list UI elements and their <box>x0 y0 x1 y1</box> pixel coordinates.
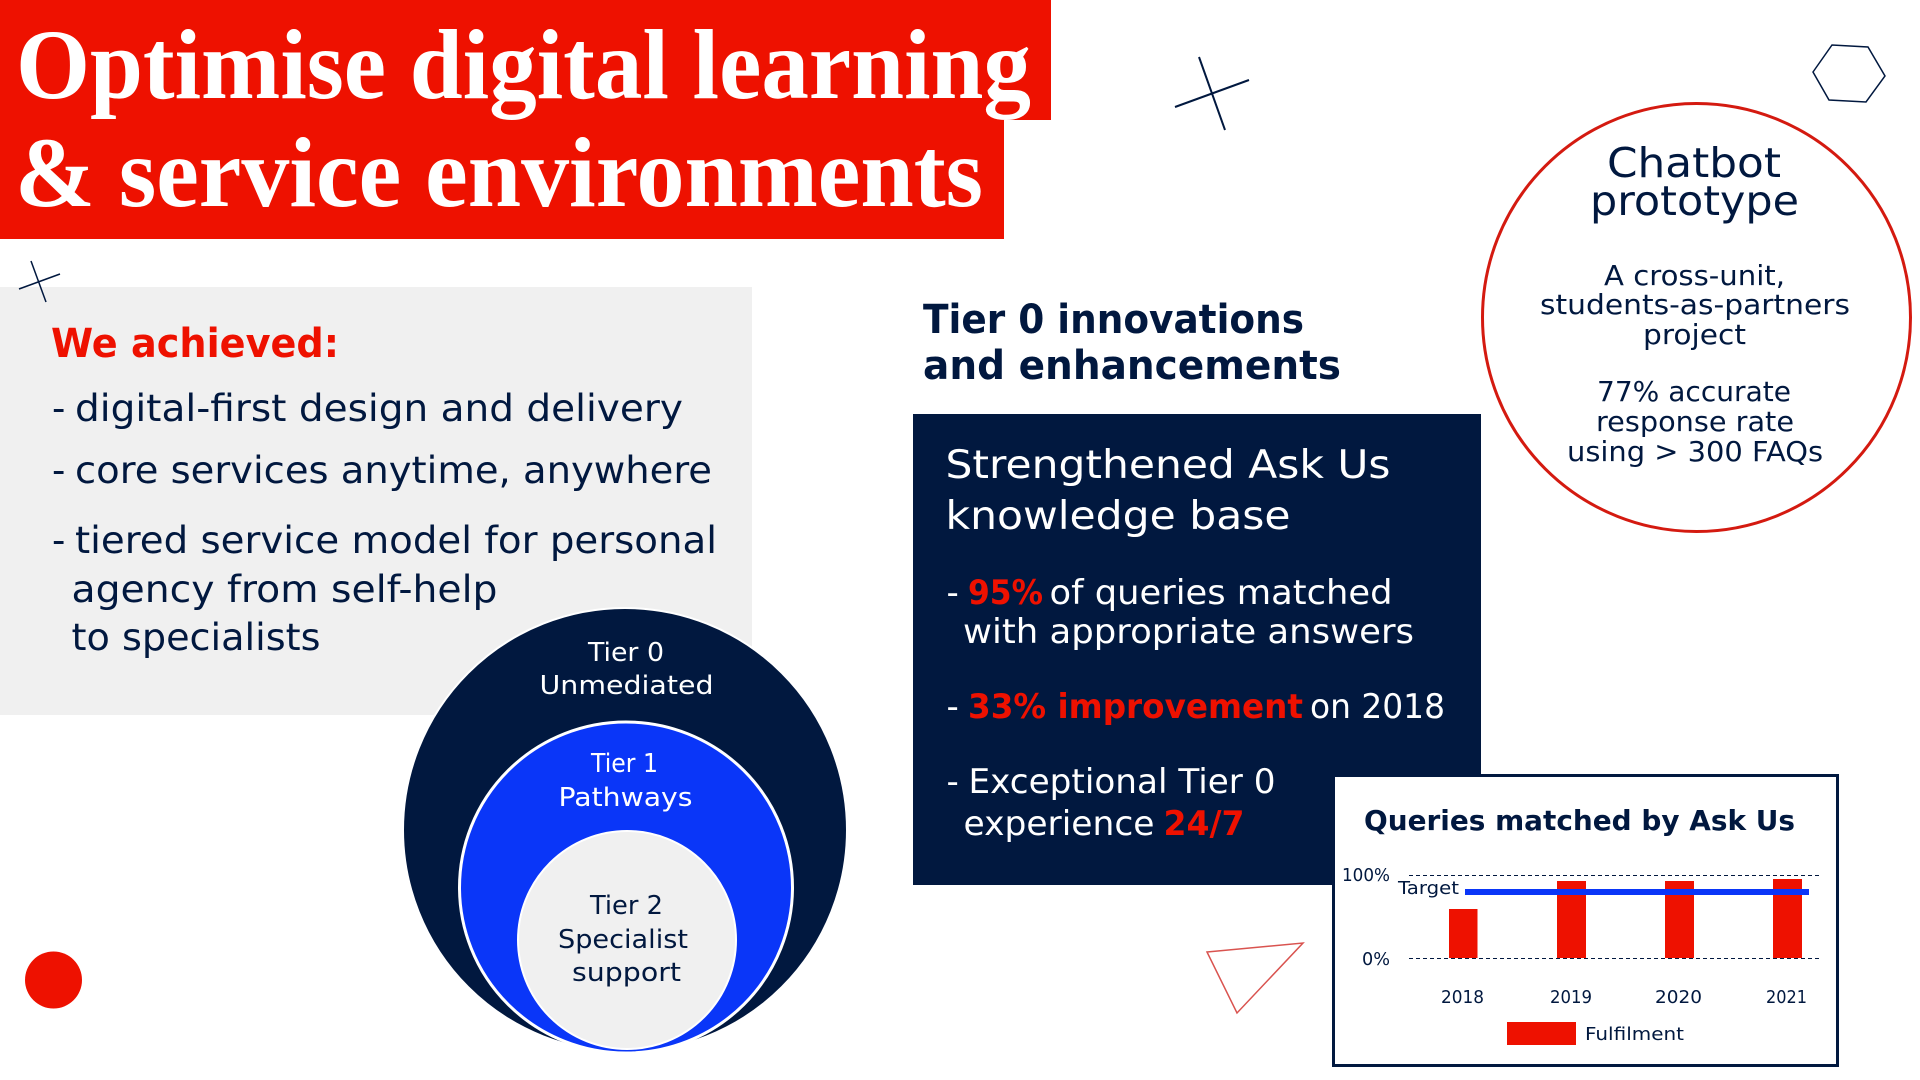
bullet: 33% improvement: on 2018 <box>1310 687 1445 727</box>
panel heading <box>946 443 1390 539</box>
bullet: exceptional experience: 24/7 <box>1164 804 1244 844</box>
tier 1 label: Tier 1 <box>590 749 658 779</box>
tier 0 label: Tier 0 <box>587 638 664 668</box>
target label: Target <box>1397 879 1459 899</box>
bullet: 33% improvement: 33% improvement <box>968 687 1303 727</box>
legend <box>1507 1022 1684 1045</box>
tier 2 label <box>558 891 688 988</box>
heading: we achieved: We achieved: <box>51 321 339 367</box>
chatbot heading <box>1590 139 1799 225</box>
title line 1: Optimise digital learning <box>16 9 1031 120</box>
achievement list <box>52 387 717 659</box>
icon: triangle outline <box>1207 943 1303 1013</box>
bullet: 33% improvement <box>946 687 1445 727</box>
tier 1 label <box>558 749 692 813</box>
chart title: Queries matched by Ask Us <box>1364 805 1795 837</box>
chatbot heading: prototype <box>1590 177 1799 225</box>
x axis labels: 2019 <box>1550 987 1592 1008</box>
tier 2 label: support <box>572 958 681 988</box>
icon: hexagon <box>1813 45 1885 102</box>
panel: chatbot prototype <box>1482 104 1910 532</box>
achievement list: agency from self-help <box>72 568 497 611</box>
y axis labels: 0% <box>1362 950 1390 970</box>
bar chart <box>1449 879 1802 958</box>
chatbot description: project <box>1643 318 1746 351</box>
tier 2 label: Tier 2 <box>589 891 663 921</box>
heading: tier 0 innovations: and enhancements <box>923 343 1341 389</box>
panel heading: knowledge base <box>946 494 1290 539</box>
achievement list: digital-first design and delivery <box>75 387 683 430</box>
y axis labels: 100% <box>1342 866 1390 886</box>
tier 1 circle <box>460 722 792 1053</box>
bullet: 95% matched: 95% <box>968 573 1043 613</box>
panel: strengthened ask us <box>913 414 1481 885</box>
tier 0 label <box>540 638 714 701</box>
panel: we achieved <box>0 287 752 715</box>
bullet: 95% matched: - <box>946 573 959 613</box>
heading: tier 0 innovations <box>923 297 1341 389</box>
tier model diagram <box>403 608 847 1053</box>
heading: tier 0 innovations: Tier 0 innovations <box>923 297 1304 343</box>
icon: small cross <box>19 261 60 302</box>
title banner <box>0 0 1051 239</box>
tier 2 label: Specialist <box>558 925 688 955</box>
chatbot accuracy: response rate <box>1596 405 1794 438</box>
panel heading: Strengthened Ask Us <box>946 443 1390 488</box>
chatbot accuracy: using > 300 FAQs <box>1567 435 1823 468</box>
chatbot accuracy: 77% accurate <box>1597 375 1791 408</box>
x axis labels: 2018 <box>1441 987 1484 1008</box>
bullet: 95% matched <box>946 573 1414 652</box>
chatbot description <box>1540 259 1850 351</box>
bullet: 33% improvement: - <box>946 687 959 727</box>
tier 1 label: Pathways <box>558 783 692 813</box>
bullet: exceptional experience: experience <box>964 804 1154 844</box>
chatbot description: students-as-partners <box>1540 288 1850 321</box>
x axis labels: 2020 <box>1655 987 1702 1008</box>
title line 2: & service environments <box>15 117 983 228</box>
tier 2 circle <box>518 831 736 1049</box>
bullet: exceptional experience: - <box>946 762 959 802</box>
icon: large cross <box>1175 57 1249 130</box>
bullet: 95% matched: with appropriate answers <box>963 612 1414 652</box>
tier 0 label: Unmediated <box>540 671 714 701</box>
target line <box>1465 889 1809 895</box>
legend: Fulfilment <box>1585 1024 1684 1045</box>
bullet: exceptional experience: Exceptional Tier 0 <box>968 762 1276 802</box>
achievement list: - <box>52 519 65 562</box>
achievement list: - <box>52 449 65 492</box>
chatbot heading: Chatbot <box>1607 139 1781 187</box>
x axis labels: 2021 <box>1766 987 1807 1008</box>
achievement list: core services anytime, anywhere <box>75 449 712 492</box>
y axis labels <box>1342 866 1390 970</box>
icon: red dot <box>25 952 82 1008</box>
achievement list: to specialists <box>72 616 320 659</box>
x axis labels <box>1441 987 1807 1008</box>
bullet: exceptional experience <box>946 762 1276 844</box>
achievement list: - <box>52 387 65 430</box>
chart card: queries matched by ask us <box>1334 776 1838 1066</box>
chatbot accuracy <box>1567 375 1823 468</box>
achievement list: tiered service model for personal <box>75 519 717 562</box>
chatbot description: A cross-unit, <box>1604 259 1785 292</box>
bullet: 95% matched: of queries matched <box>1050 573 1392 613</box>
